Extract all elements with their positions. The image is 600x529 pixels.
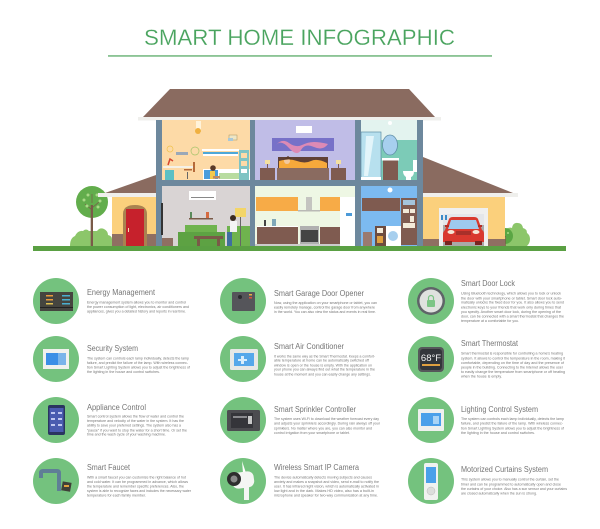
item: Motorized Curtains System [408, 458, 567, 504]
icon: phone [48, 405, 65, 435]
item: Security System: failure, and predict the failure of the lamp. With wireless connec- [87, 361, 189, 365]
item: Smart Thermostat: when the house is empty. [461, 375, 502, 379]
item: Smart Air Conditioner: It works the same way as the Smart Thermostat. Keeps a comfort- [274, 354, 376, 358]
item: Smart Door Lock: Using Bluetooth technology, which allows you to lock or unlock [461, 292, 561, 296]
icon: security panel [43, 349, 69, 369]
house frame [156, 120, 423, 246]
item: Wireless Smart IP Camera: anxiety and makes a snapshot and video, send e-mail to notify the [274, 480, 379, 484]
item: Smart Faucet: Smart Faucet [87, 463, 131, 472]
room: bathroom [361, 120, 417, 180]
item: Security System: the lighting in the house and control switches. [87, 370, 160, 374]
item: Smart Thermostat: to easily change the temperature from smartphone or off heating [461, 370, 565, 374]
item: Motorized Curtains System: Motorized Curtains System [461, 465, 548, 474]
icon: IP camera [227, 461, 255, 500]
item: Smart Faucet: system is able to recognize faces and includes the necessary water [87, 489, 192, 493]
item: Energy Management: Energy management system allows you to monitor and control [87, 300, 186, 304]
item: Wireless Smart IP Camera: The device automatically detects moving subjects and causes [274, 475, 372, 479]
item: Appliance Control: Smart control system allows the flow of water and control the [87, 415, 184, 419]
item: Smart Garage Door Opener: easily remotely manage, control the garage door from anywhere [274, 305, 375, 309]
room: living room [161, 186, 250, 246]
item: Smart Sprinkler Controller: The system uses Wi-Fi to download the weather forecast every day [274, 417, 379, 421]
item: Appliance Control: Appliance Control [87, 403, 146, 412]
item: Smart Thermostat [408, 336, 566, 382]
item: Lighting Control System: the lighting in the house and control switches. [461, 431, 535, 435]
item: Lighting Control System: Lighting Control System [461, 405, 538, 414]
item: Smart Air Conditioner [220, 336, 376, 382]
item: Smart Faucet: temperature for each family member. [87, 493, 146, 497]
item: Smart Air Conditioner: Smart Air Conditioner [274, 342, 344, 351]
item: Appliance Control [33, 397, 187, 443]
person: man with laptop [227, 215, 237, 246]
item: Smart Sprinkler Controller: Smart Sprinkler Controller [274, 405, 356, 414]
item: Energy Management: the power consumption of light, electronics, air conditioners and [87, 305, 189, 309]
item: Wireless Smart IP Camera [220, 458, 379, 504]
item: Smart Sprinkler Controller: and adjusts your sprinklers accordingly. During rain always off your [274, 422, 381, 426]
item: Smart Thermostat: system. It allows to control the temperature in the room, making it [461, 356, 566, 360]
person: child reading [210, 165, 220, 179]
room: laundry [361, 186, 417, 246]
item: Smart Door Lock: door, can be connected with a smart thermostat that changes the [461, 314, 564, 318]
item: Smart Door Lock: electronic keys to your friends that work only during times that [461, 305, 562, 309]
icon: door lock [417, 287, 445, 315]
item: Appliance Control: time and the wash cycle of your washing machine. [87, 433, 166, 437]
item: Smart Air Conditioner: able temperature at home can be automatically switched off [274, 359, 370, 363]
icon: thermostat: 68°F [421, 353, 441, 364]
icon: lighting panel [418, 409, 444, 431]
item: Security System: Security System [87, 344, 138, 353]
item: Smart Thermostat: Smart thermostat is responsible for controlling a home's heating [461, 352, 563, 356]
item: Security System: tion Smart Lighting System allows you to adjust the brightness of [87, 365, 191, 369]
item: Appliance Control: “pause” if you want to stop the water for a short time. Or set the [87, 428, 187, 432]
main roof [138, 89, 441, 120]
item: Appliance Control: temperature and velocity of the water in the system. It has the [87, 419, 184, 423]
item: Motorized Curtains System: are closed automatically when the sun is strong. [461, 492, 537, 496]
item: Smart Door Lock: the door with your smartphone or tablet. Smart door lock auto- [461, 296, 563, 300]
item: Smart Door Lock: you specify. Another smart door lock, during the opening of the [461, 310, 561, 314]
icon: curtain remote [424, 463, 438, 500]
room: kids bedroom [162, 120, 250, 180]
item: Smart Thermostat: Smart Thermostat [461, 339, 519, 348]
item: Smart Faucet [33, 458, 192, 504]
item: Smart Garage Door Opener [220, 278, 377, 324]
item: Smart Garage Door Opener: Smart Garage Door Opener [274, 289, 364, 298]
item: Smart Faucet: With a smart faucet you can customize the right balance of hot [87, 475, 187, 479]
item: Smart Garage Door Opener: Now, using the application on your smartphone or tablet, you can [274, 301, 377, 305]
item: Smart Air Conditioner: window is open or the house is empty. With the application on [274, 363, 372, 367]
icon: AC panel [230, 349, 258, 370]
item: Lighting Control System: failure, and predict the failure of the lamp. With wireless connec- [461, 422, 564, 426]
person: sleeping [283, 156, 292, 164]
icon: thermostat [418, 347, 444, 372]
item: Smart Sprinkler Controller [220, 397, 381, 443]
icon: energy monitor [40, 292, 73, 311]
item: Smart Door Lock: matically unlocks the fixed door for you. It also allows you to send [461, 301, 564, 305]
item: Security System: The system can controls each lamp individually, detects the lamp [87, 357, 189, 361]
item: Smart Sprinkler Controller: sprinklers. No matter where you are, you can also monitor and [274, 426, 372, 430]
item: Wireless Smart IP Camera: microphone and speaker for two-way communication at any time. [274, 493, 378, 497]
item: Lighting Control System: tion Smart Lighting System allows you to adjust the brightness of [461, 426, 565, 430]
item: Lighting Control System [408, 397, 565, 443]
item: Smart Door Lock [408, 278, 564, 324]
item: Smart Faucet: and cold water. It can be programmed in advance, which allows [87, 480, 188, 484]
item: Wireless Smart IP Camera: low light and in the dark. Makes HD video, also has a built-in [274, 489, 374, 493]
item: Smart Garage Door Opener: in the world. You can also view the status and events in real time. [274, 310, 376, 314]
illustration: house cross-section [33, 89, 566, 251]
icon: red car [443, 217, 484, 245]
left wing [98, 175, 156, 246]
room: master bedroom [255, 120, 355, 180]
item: Energy Management: Energy Management [87, 288, 156, 297]
left tree and bushes [70, 186, 112, 246]
item: Smart Air Conditioner: house at the moment and you can easily change any settings. [274, 372, 371, 376]
item: Energy Management [33, 278, 189, 324]
item: Smart Faucet: the temperature and remember specific preferences. Also, the [87, 484, 184, 488]
item: Motorized Curtains System: the curtains of your choice. Also has a sun sensor and your curtains [461, 487, 567, 491]
item: Appliance Control: ability to save your preferred settings. The system also has a [87, 424, 182, 428]
item: Lighting Control System: The system can controls each lamp individually, detects the lamp [461, 417, 564, 421]
item: Motorized Curtains System: This system allows you to manually control the curtain, set the [461, 477, 559, 481]
right wing and garage [423, 157, 518, 246]
item: Energy Management: appliances, gives you a detailed history and reports in real time. [87, 309, 186, 313]
item: Smart Door Lock: Smart Door Lock [461, 279, 515, 288]
item: Wireless Smart IP Camera: user. It has infrared night vision, which is automatically activated in [274, 484, 379, 488]
item: Security System [33, 336, 191, 382]
icon: faucet [41, 471, 72, 492]
ground strip [33, 246, 566, 251]
item: Motorized Curtains System: timer and can be programmed to automatically open and close [461, 482, 561, 486]
item: Smart Door Lock: temperature at a comfortable for you. [461, 319, 519, 323]
title underline [108, 55, 492, 57]
title: SMART HOME INFOGRAPHIC [144, 25, 455, 50]
icon: garage opener [232, 292, 255, 311]
item: Smart Sprinkler Controller: control irrigation from your smartphone or tablet. [274, 431, 350, 435]
right tree and bushes [497, 223, 530, 246]
item: Smart Thermostat: people in the building. Connecting to the Internet allows the user [461, 366, 564, 370]
item: Smart Air Conditioner: your phone you can always find out what the temperature in the [274, 368, 375, 372]
item: Wireless Smart IP Camera: Wireless Smart IP Camera [274, 463, 360, 472]
room: kitchen [255, 186, 355, 246]
icon: sprinkler panel [227, 410, 260, 431]
item: Smart Thermostat: comfortable, depending on the time of day and the presence of [461, 361, 565, 365]
